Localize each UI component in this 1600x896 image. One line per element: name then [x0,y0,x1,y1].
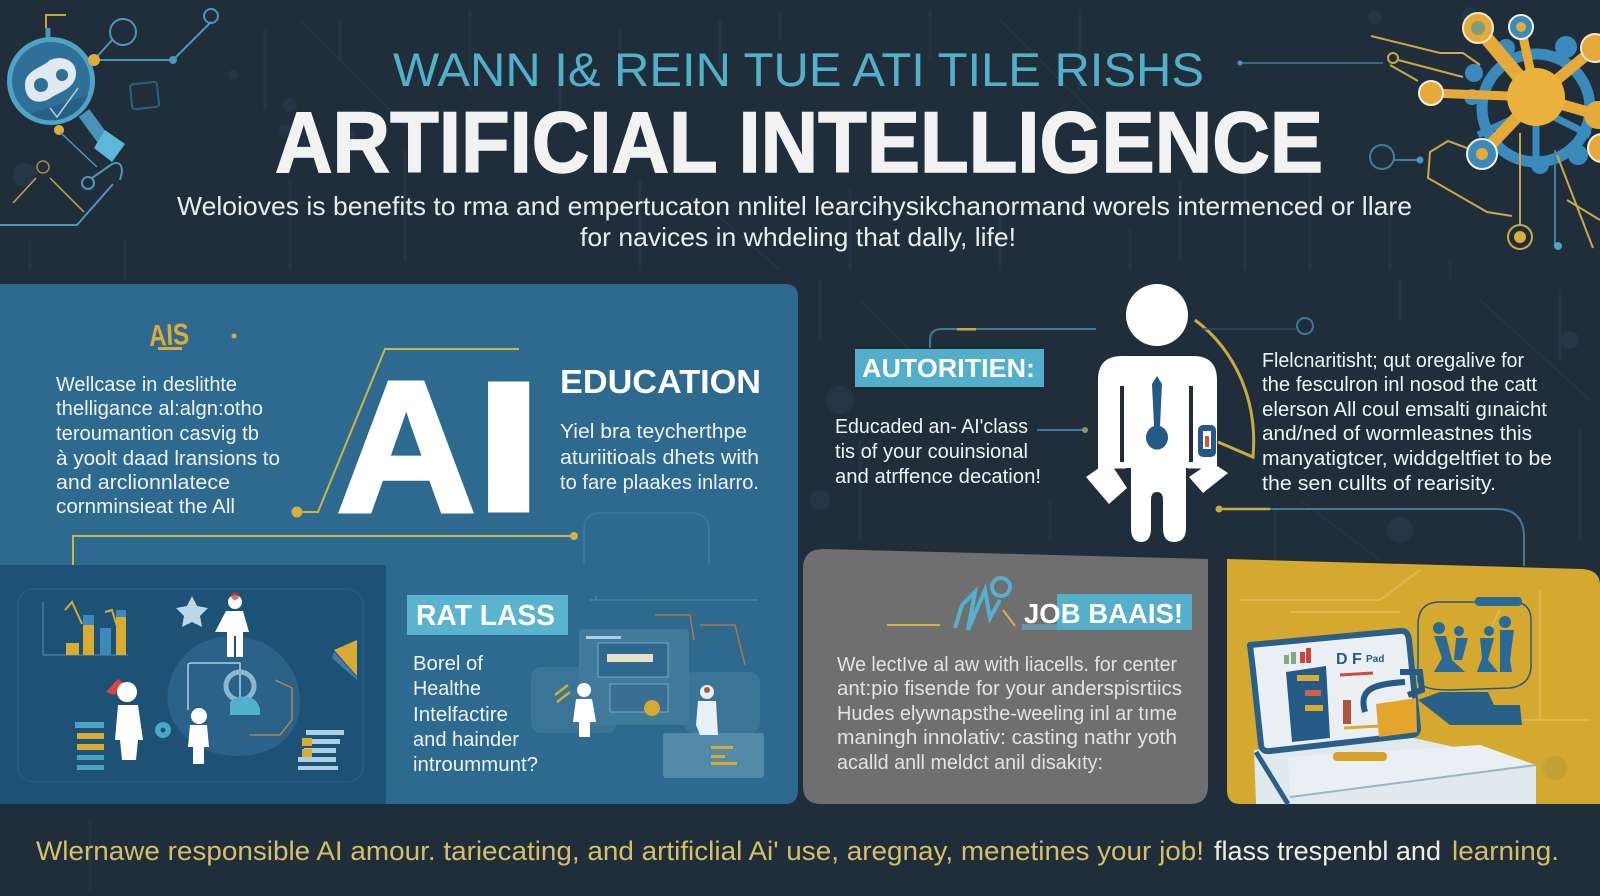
big AI letters [337,343,544,551]
panel: AI education [0,284,798,804]
books graphic [298,730,344,770]
big AI letters: I [473,343,544,551]
icon: gold AI mark [148,318,236,353]
laptop screen: D F [1336,651,1362,668]
text: rat lass paragraph: and hainder [413,729,519,751]
figure: lab person left [573,683,596,737]
text: education paragraph: to fare plaakes inlarro. [560,472,759,494]
text: job paragraph: maningh innolativ: casting nathr yoth [837,727,1177,749]
icon: teal pen and bulb [887,578,1015,630]
text: rat lass paragraph: introummunt? [413,754,538,776]
text: job paragraph [837,654,1182,774]
arc: gold connector [1195,318,1313,457]
text: right paragraph: manyatigtcer, widdgeltfiet to be [1262,448,1552,470]
panel: job baais [803,549,1208,804]
figure: lab person right [696,685,718,735]
stain decoration [1543,756,1567,780]
text: job paragraph: ant:pio fisende for your anderspisrtiics [837,678,1182,700]
connector: gold line to AI [292,349,519,516]
text: right paragraph: Flelcnaritisht; qut oregalive for [1262,350,1524,372]
connector: gold line to sub panel [73,533,577,565]
text: job paragraph: We lectIve al aw with liacells. for center [837,654,1177,676]
label: autoritien [855,328,1096,387]
icon: gold tag [332,640,357,680]
text: autoritien paragraph [835,416,1041,488]
label: rat lass: RAT LASS [416,600,555,632]
footer message: learning. [1452,836,1559,866]
text: rat lass paragraph [413,653,538,776]
heading: education: EDUCATION [560,363,761,400]
text: rat lass paragraph: Intelfactire [413,704,508,726]
big AI letters: A [337,344,475,551]
text: rat lass paragraph: Borel of [413,653,483,675]
laptop screen [1250,631,1418,751]
bubble with group of people [1418,597,1531,690]
laptop screen: Pad [1366,654,1384,665]
text: intro paragraph: and arclionnlatece [56,472,230,494]
gold note card [1376,698,1417,737]
icon: gold AI mark: AIS [148,318,190,353]
label: autoritien: AUTORITIEN: [862,353,1035,383]
text: intro paragraph: Wellcase in deslithte [56,374,237,396]
text: intro paragraph: thelligance al:algn:otho [56,398,263,420]
label: job baais: JOB BAAIS! [1024,598,1183,629]
text: intro paragraph: à yoolt daad lransions to [56,448,280,470]
text: autoritien paragraph: tis of your couinsional [835,441,1028,463]
figure: woman [106,679,143,760]
arm to bubble [1363,672,1422,712]
text: right paragraph: the fesculron inl nosod the catt [1262,374,1537,396]
text: autoritien paragraph: and atrffence decation! [835,466,1041,488]
intro text: Weloioves is benefits to rma and empertucaton nnlitel learcihysikchanormand worels intermenced or llare [177,191,1412,221]
illustration: lab machines and people [531,596,764,778]
footer message: Wlernawe responsible AI amour. tariecating, and artificlial Ai' use, aregnay, menetines your job! [36,836,1204,866]
intro text [177,191,1412,252]
figure: central person with tie [1086,284,1228,542]
text: job paragraph: Hudes elywnapsthe-weeling inl ar tıme [837,703,1177,725]
bar chart [43,602,128,655]
connector: label to figure [1037,427,1088,433]
text: intro paragraph: teroumantion casvig tb [56,423,259,445]
figure: doctor [215,592,249,657]
icon: AI network hub [1238,13,1600,250]
connector: right paragraph to yellow panel [1216,506,1524,566]
text: job paragraph: acalld anll meldct anil disakıty: [837,752,1103,774]
heading: subtitle line: WANN I& REIN TUE ATI TILE RISHS [393,43,1204,96]
icon: arm badge [1198,425,1216,457]
text: right paragraph: and/ned of wormleastnes this [1262,423,1532,445]
panel: yellow laptop illustration [1227,559,1600,804]
text: right paragraph: the sen cullts of rearisity. [1262,473,1496,495]
text: intro paragraph: cornminsieat the All [56,496,235,518]
figure: child [188,708,209,764]
laptop base [1254,735,1536,804]
text: right paragraph [1262,350,1552,495]
sub-panel: illustration of people and data [0,565,386,804]
text: education paragraph [560,421,759,494]
text: education paragraph: Yiel bra teycherthpe [560,421,747,443]
text: autoritien paragraph: Educaded an- AI'class [835,416,1028,438]
icon: teal circle [155,722,171,738]
title: ARTIFICIAL INTELLIGENCE [275,95,1323,191]
list graphic [75,722,104,770]
central mini symbols [188,663,292,735]
intro text: for navices in whdeling that dally, life! [580,222,1016,252]
text: intro paragraph [56,374,280,518]
icon: magnifier with robot [0,9,218,225]
text: right paragraph: elerson All coul emsalti gınaicht [1262,399,1547,421]
text: education paragraph: aturiitioals dhets with [560,447,759,469]
footer message: flass trespenbl and [1214,836,1441,866]
dark blue stand [1418,692,1522,725]
icon: star [176,596,208,627]
text: rat lass paragraph: Healthe [413,678,481,700]
